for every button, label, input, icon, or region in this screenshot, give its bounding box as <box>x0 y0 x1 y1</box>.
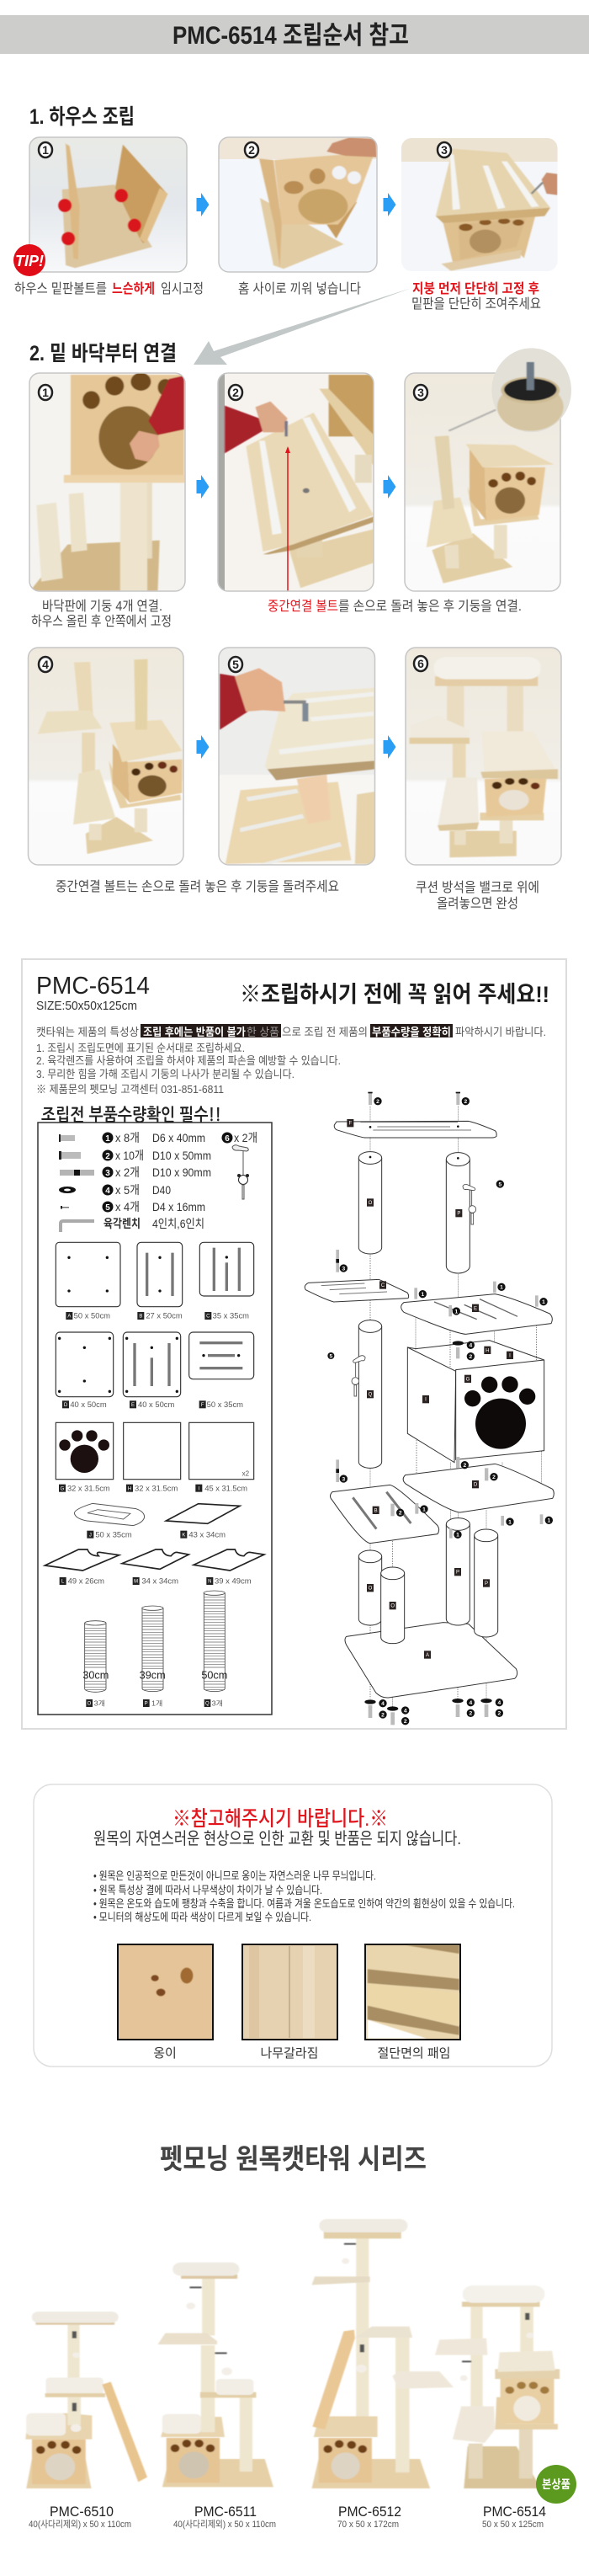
part letters: P <box>457 1212 460 1217</box>
boards G-N and posts O-Q: 39 x 49cm <box>215 1577 252 1586</box>
part letters: O <box>369 1587 373 1592</box>
product: PMC-6510: PMC-6510 <box>50 2504 114 2520</box>
boards A-F: A <box>67 1315 71 1320</box>
boards A-F: F <box>201 1403 204 1408</box>
boards G-N and posts O-Q: 32 x 31.5cm <box>135 1484 178 1492</box>
hardware list: D10 x 90mm <box>152 1165 211 1179</box>
notice line with highlights: 조립 후에는 반품이 불가 <box>143 1026 246 1038</box>
boards A-F <box>56 1242 254 1409</box>
post Q <box>201 1591 227 1692</box>
part letters: E <box>474 1306 477 1311</box>
part letters: G <box>466 1377 470 1382</box>
badge 3-3 <box>414 656 427 671</box>
part letters <box>349 1122 511 1658</box>
boards G-N and posts O-Q: G <box>61 1486 65 1491</box>
photo: wood knots <box>118 1944 213 2040</box>
photo frame 3-2 <box>219 648 375 865</box>
boards G-N and posts O-Q: x2 <box>242 1469 250 1477</box>
notice line with highlights: 한 상품 <box>247 1026 279 1038</box>
instruction list: 2. 육각렌즈를 사용하여 조립을 하셔야 제품의 파손을 예방할 수 있습니다. <box>36 1054 341 1067</box>
marker numbers: 1 <box>421 1292 424 1298</box>
boards G-N and posts O-Q: J <box>89 1533 92 1538</box>
badge 2-2: 2 <box>232 386 239 399</box>
boards G-N and posts O-Q: K <box>182 1533 185 1538</box>
badge 1: 1 <box>42 143 49 157</box>
badge 2-3: 3 <box>417 386 424 399</box>
tip badge: TIP! <box>15 253 44 269</box>
model name: PMC-6514 <box>36 973 150 1000</box>
badge 3 <box>438 142 451 157</box>
badge 3: 3 <box>441 143 448 157</box>
red pointer line <box>285 446 290 596</box>
photo frame 2-2 <box>218 373 374 591</box>
product: PMC-6512 <box>312 2219 454 2530</box>
part letters: F <box>349 1122 353 1127</box>
house box front face <box>456 1360 544 1459</box>
photo 1-1: base and side boards <box>29 137 187 272</box>
notice subheading: 원목의 자연스러운 현상으로 인한 교환 및 반품은 되지 않습니다. <box>93 1829 461 1848</box>
marker numbers: 1 <box>500 1285 503 1291</box>
marker numbers: 3 <box>342 1476 345 1482</box>
photo captions: 옹이 <box>153 2046 177 2061</box>
house box left face <box>407 1347 456 1463</box>
boards G-N and posts O-Q: 45 x 31.5cm <box>204 1484 247 1492</box>
boards G-N and posts O-Q: L <box>61 1580 65 1585</box>
photo frame 1-1 <box>29 137 187 272</box>
part letters: P <box>485 1581 488 1587</box>
boards A-F: 27 x 50cm <box>146 1312 183 1320</box>
boards G-N and posts O-Q: 32 x 31.5cm <box>67 1484 110 1492</box>
marker numbers: 4 <box>404 1708 407 1714</box>
caption 1-1: 임시고정 <box>161 281 204 296</box>
boards G-N and posts O-Q: 43 x 34cm <box>188 1530 226 1539</box>
photo captions: 절단면의 패임 <box>378 2046 450 2061</box>
upper posts <box>358 1152 470 1468</box>
arrow 3-2 <box>384 735 395 759</box>
caption 3-3 <box>416 880 539 911</box>
marker numbers: 2 <box>404 1719 407 1725</box>
boards G-N and posts O-Q: 49 x 26cm <box>68 1577 104 1586</box>
boards G-N and posts O-Q: O <box>88 1702 92 1707</box>
bullet list: • 원목은 인공적으로 만든것이 아니므로 옹이는 자연스러운 나무 무늬입니다. <box>93 1869 376 1882</box>
hardware list: 육각렌치 <box>103 1217 141 1230</box>
boards A-F: 50 x 50cm <box>74 1312 110 1320</box>
heading: step 2: 2. 밑 바닥부터 연결 <box>29 342 177 365</box>
marker numbers: 4 <box>381 1701 385 1707</box>
boards G-N and posts O-Q <box>45 1422 264 1708</box>
hardware list: 4 <box>105 1187 110 1196</box>
part letters: P <box>456 1571 459 1576</box>
product: PMC-6511: PMC-6511 <box>194 2504 257 2520</box>
boards G-N and posts O-Q: N <box>208 1580 211 1585</box>
size: SIZE:50x50x125cm <box>36 999 137 1013</box>
instruction list: 3. 무리한 힘을 가해 조립시 기둥의 나사가 분리될 수 있습니다. <box>36 1068 294 1080</box>
part letter tags <box>347 1119 513 1659</box>
hardware list: 4인치,6인치 <box>152 1217 204 1230</box>
series title: 펫모닝 원목캣타워 시리즈 <box>160 2143 427 2174</box>
parts heading: 조립전 부품수량확인 필수!! <box>41 1106 221 1124</box>
badge 2-2 <box>229 385 242 400</box>
top plate F <box>334 1121 496 1138</box>
caption 2-1: 하우스 올린 후 안쪽에서 고정 <box>31 614 172 629</box>
hardware list: x 2개 <box>115 1165 140 1179</box>
icon: toy with bear <box>232 1145 249 1199</box>
bullet list: • 원목은 온도와 습도에 팽창과 수축을 합니다. 여름과 겨울 온도습도로 인하여 약간의 휨현상이 있을 수 있습니다. <box>93 1897 515 1910</box>
notice line with highlights <box>36 1024 546 1038</box>
marker numbers: 1 <box>547 1518 550 1524</box>
caption 1-1: 느슨하게 <box>112 281 155 296</box>
marker numbers: 1 <box>542 1299 545 1305</box>
boards G-N and posts O-Q: 34 x 34cm <box>141 1577 178 1586</box>
part letters: B <box>374 1508 378 1513</box>
arrow 1-1 <box>197 193 209 216</box>
product: PMC-6511: 40(사다리제외) x 50 x 110cm <box>173 2519 276 2530</box>
bullet list <box>93 1869 515 1923</box>
post P <box>140 1606 166 1692</box>
marker numbers: 2 <box>399 1511 402 1517</box>
marker numbers: 1 <box>454 1309 458 1315</box>
product: PMC-6512: PMC-6512 <box>338 2504 401 2520</box>
badge 3-1 <box>39 657 52 672</box>
photo frame 2-1 <box>29 373 185 591</box>
product: PMC-6514: 50 x 50 x 125cm <box>482 2520 544 2530</box>
header band <box>0 15 589 54</box>
product: PMC-6510 <box>25 2312 147 2530</box>
marker numbers: 2 <box>381 1712 385 1718</box>
plate D <box>403 1464 554 1512</box>
badge 1 <box>39 142 52 157</box>
part letters: D <box>474 1483 478 1488</box>
caption 3-1: 중간연결 볼트는 손으로 돌려 놓은 후 기둥을 돌려주세요 <box>56 879 339 894</box>
boards G-N and posts O-Q: 50 x 35cm <box>95 1530 132 1539</box>
parts box <box>38 1123 272 1715</box>
badge 3-2 <box>229 657 242 672</box>
marker numbers: 2 <box>492 1475 496 1480</box>
boards A-F: B <box>139 1315 142 1320</box>
boards G-N and posts O-Q: P <box>145 1702 148 1707</box>
hardware list: 1 <box>105 1134 110 1144</box>
boards G-N and posts O-Q: H <box>128 1486 131 1491</box>
part letters: H <box>486 1348 489 1353</box>
marker numbers: 2 <box>376 1099 379 1105</box>
instruction list: 1. 조립시 조립도면에 표기된 순서대로 조립하세요. <box>36 1042 245 1054</box>
boards A-F: 50 x 35cm <box>207 1400 243 1409</box>
post O back <box>358 1550 382 1625</box>
boards G-N and posts O-Q: M <box>134 1580 138 1585</box>
hardware list: 2 <box>105 1152 110 1161</box>
bullet list: • 모니터의 해상도에 따라 색상이 다르게 보일 수 있습니다. <box>93 1911 311 1923</box>
screw markers <box>327 1092 553 1725</box>
product: PMC-6512: 70 x 50 x 172cm <box>337 2520 399 2530</box>
photo frame 1-2 <box>219 137 377 272</box>
hardware list: D10 x 50mm <box>152 1149 211 1162</box>
marker numbers: 4 <box>469 1700 472 1706</box>
heading: step 1: 1. 하우스 조립 <box>29 105 135 129</box>
hardware list: x 2개 <box>234 1131 257 1144</box>
marker numbers: 2 <box>469 1354 472 1360</box>
part letters: Q <box>369 1393 373 1398</box>
arrow 3-1 <box>197 735 209 759</box>
marker numbers: 5 <box>498 1181 501 1187</box>
hardware list: x 5개 <box>115 1183 140 1197</box>
toy hangers <box>352 1184 476 1396</box>
product: PMC-6514: PMC-6514 <box>483 2504 546 2520</box>
boards G-N and posts O-Q: 1개 <box>151 1699 162 1708</box>
marker numbers: 4 <box>469 1343 472 1349</box>
notice line with highlights: 캣타워는 제품의 특성상 <box>36 1026 139 1038</box>
plate C <box>305 1279 409 1302</box>
post P: 39cm <box>140 1668 166 1681</box>
photo frame 3-1 <box>29 648 183 865</box>
hardware list: 3 <box>105 1169 110 1178</box>
photo captions <box>153 2046 450 2061</box>
photo 1-3: roof fixed on box <box>401 138 558 271</box>
badge: this product: 본상품 <box>542 2477 570 2491</box>
boards A-F: C <box>206 1315 210 1320</box>
caption 2-1: 바닥판에 기둥 4개 연결. <box>42 599 162 614</box>
hardware list: D40 <box>152 1183 171 1197</box>
caption 3-3: 올려놓으면 완성 <box>437 896 518 911</box>
photo 3-2: turning the post <box>219 648 377 866</box>
tip badge <box>13 244 45 276</box>
dotted guide lines <box>370 1106 541 1707</box>
plate A <box>345 1623 517 1698</box>
hardware list: D4 x 16mm <box>152 1200 205 1213</box>
boards G-N and posts O-Q: I <box>198 1486 199 1491</box>
arrow 1-2 <box>384 193 395 216</box>
badge 3-1: 4 <box>42 658 49 671</box>
hardware list: x 10개 <box>115 1149 144 1162</box>
boards A-F: E <box>131 1403 135 1408</box>
panel: natural wood notice <box>34 1784 552 2067</box>
marker numbers: 5 <box>329 1353 332 1359</box>
photo: wood split <box>242 1944 337 2040</box>
arrow 2-1 <box>197 475 209 499</box>
hardware list: x 4개 <box>115 1200 140 1213</box>
part letters: O <box>390 1604 395 1609</box>
post O front <box>381 1567 405 1644</box>
post O <box>82 1621 109 1692</box>
hardware list: 6 <box>225 1134 230 1144</box>
caption 2-2: 를 손으로 돌려 놓은 후 기둥을 연결. <box>338 599 522 614</box>
boards A-F: 40 x 50cm <box>70 1400 107 1409</box>
badge 2: 2 <box>248 143 255 157</box>
caption 3-3: 쿠션 방석을 밸크로 위에 <box>416 880 539 895</box>
part letters: O <box>369 1201 373 1206</box>
instruction list: ※ 제품문의 펫모닝 고객센터 031-851-6811 <box>36 1083 224 1096</box>
marker numbers: 1 <box>422 1507 426 1512</box>
photo 2-2: middle connecting bolt <box>218 373 374 596</box>
marker numbers <box>329 1099 550 1725</box>
caption 1-2: 홈 사이로 끼워 넣습니다 <box>238 281 361 296</box>
post P front <box>475 1529 498 1637</box>
post Q: 50cm <box>201 1668 227 1681</box>
badge 2-1: 1 <box>42 386 49 399</box>
hardware list: x 8개 <box>115 1131 140 1144</box>
plate E <box>401 1294 552 1334</box>
notice heading: ※참고해주시기 바랍니다.※ <box>172 1807 388 1831</box>
part letters: A <box>426 1653 429 1658</box>
detail bubble: bolt in post <box>491 348 571 432</box>
notice line with highlights: 으로 조립 전 제품의 <box>282 1026 368 1038</box>
boards G-N and posts O-Q: 3개 <box>212 1699 223 1708</box>
boards A-F: 40 x 50cm <box>138 1400 174 1409</box>
arrow 2-2 <box>384 475 395 499</box>
caption 1-3: 지붕 먼저 단단히 고정 후 <box>412 281 539 296</box>
marker numbers: 3 <box>342 1266 345 1272</box>
marker numbers: 2 <box>497 1711 501 1717</box>
boards A-F: 35 x 35cm <box>213 1312 249 1320</box>
photo frame 2-3 <box>405 373 560 591</box>
caption 2-2: 중간연결 볼트 <box>268 599 338 614</box>
post P back <box>446 1518 470 1625</box>
notice line with highlights: 파악하시기 바랍니다. <box>455 1026 546 1038</box>
caption 1-3: 밑판을 단단히 조여주세요 <box>411 296 541 312</box>
page title: PMC-6514 조립순서 참고 <box>172 22 409 50</box>
exploded diagram <box>305 1092 554 1725</box>
photo frame 3-3 <box>406 648 561 865</box>
badge 2-1 <box>39 385 52 400</box>
marker numbers: 1 <box>456 1533 459 1539</box>
instruction list <box>36 1042 341 1096</box>
part letters: I <box>425 1398 427 1403</box>
panel: assembly manual <box>22 959 566 1729</box>
photo 3-3: finished tower <box>406 648 562 866</box>
boards G-N and posts O-Q: 3개 <box>94 1699 105 1708</box>
badge: this product <box>536 2465 576 2504</box>
photo 1-2: panel with paw holes <box>219 137 377 272</box>
boards A-F: D <box>64 1403 68 1408</box>
photo captions: 나무갈라짐 <box>260 2046 319 2061</box>
caption 2-1 <box>31 599 172 629</box>
warning heading: ※조립하시기 전에 꼭 읽어 주세요!! <box>240 982 549 1007</box>
badge 2-3 <box>414 385 427 400</box>
connector arrow to step 2 <box>194 288 411 365</box>
photo 3-1: two posts <box>28 648 184 866</box>
notice line with highlights: 부품수량을 정확히 <box>372 1026 451 1038</box>
paw cutout <box>464 1376 535 1449</box>
photo 2-1: mounting the house <box>29 373 185 591</box>
product: PMC-6510: 40(사다리제외) x 50 x 110cm <box>29 2519 131 2530</box>
caption 2-2 <box>268 599 522 614</box>
part letters: I <box>509 1353 511 1358</box>
marker numbers: 2 <box>469 1711 472 1717</box>
plate B <box>330 1485 439 1544</box>
badge 3-3: 6 <box>417 657 424 670</box>
marker numbers: 4 <box>497 1700 501 1706</box>
badge 2 <box>245 142 258 157</box>
badge 3-2: 5 <box>232 658 239 671</box>
product: PMC-6511 <box>157 2263 276 2530</box>
hardware list: 5 <box>105 1203 110 1213</box>
boards G-N and posts O-Q: Q <box>205 1702 210 1707</box>
hardware list <box>59 1131 257 1232</box>
marker numbers: 2 <box>464 1099 467 1105</box>
marker numbers: 1 <box>508 1519 512 1525</box>
bullet list: • 원목 특성상 결에 따라서 나무색상이 차이가 날 수 있습니다. <box>93 1884 322 1896</box>
product: PMC-6514 <box>435 2285 560 2530</box>
hardware list: D6 x 40mm <box>152 1131 205 1144</box>
caption 1-3 <box>411 281 541 312</box>
photo: cut edge <box>365 1944 460 2040</box>
caption 1-1: 하우스 밑판볼트를 <box>14 281 107 296</box>
marker numbers: 2 <box>463 1463 466 1469</box>
part letters: C <box>381 1283 385 1288</box>
post O: 30cm <box>82 1668 109 1681</box>
photo 2-3: house on post <box>405 373 560 591</box>
caption 1-1 <box>14 281 204 296</box>
